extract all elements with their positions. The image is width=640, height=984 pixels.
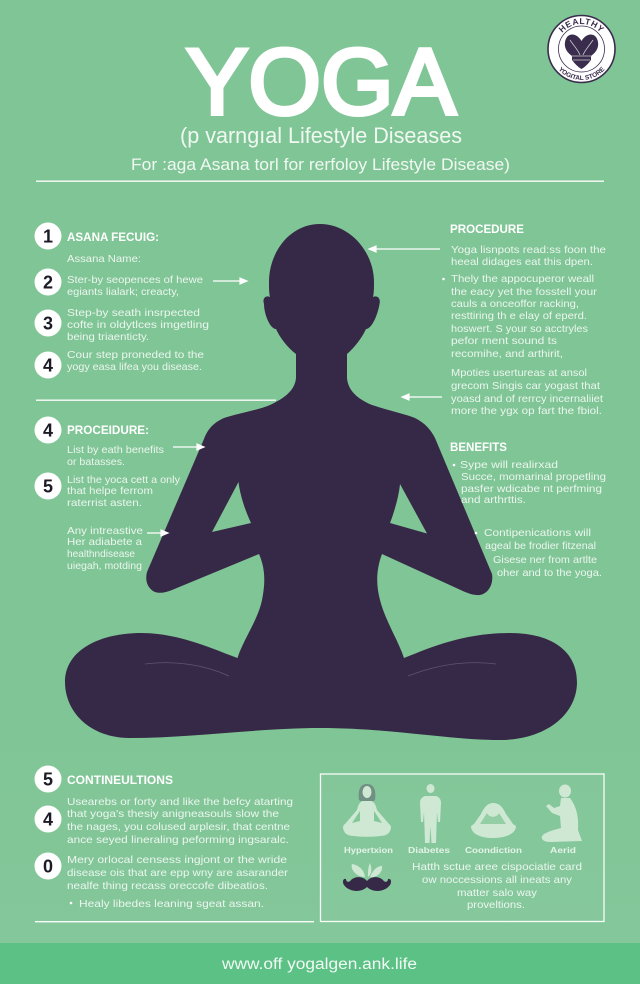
bulleted text block: Contipenications will — [484, 527, 591, 539]
footer — [0, 943, 640, 984]
heading: PROCEIDURE: — [67, 425, 149, 437]
heading: PROCEDURE — [450, 224, 524, 236]
title: YOGA — [186, 29, 456, 134]
text block: that yoga's thesiy anigneasouls slow the — [67, 808, 279, 820]
text block: raterrist asten. — [67, 497, 142, 509]
box text — [412, 861, 582, 911]
text block: grecom Singis car yogast that — [451, 380, 600, 392]
bulleted text block: oher and to the yoga. — [497, 567, 602, 579]
icon: heart with leaves — [565, 34, 598, 69]
text block: healthndisease — [67, 548, 135, 560]
badge 4: 4 — [43, 420, 53, 440]
text block: heeal didages eat this dpen. — [451, 256, 593, 268]
text block: that helpe ferrom — [67, 485, 153, 497]
badge 0: 0 — [43, 856, 53, 876]
panel: benefits — [450, 442, 606, 579]
text block: or batasses. — [67, 456, 125, 468]
badge 4 — [34, 352, 62, 378]
bulleted text block: pasfer wdicabe nt perfming — [461, 483, 602, 495]
badge 4: 4 — [43, 810, 53, 830]
badge 5 — [34, 766, 62, 792]
text block — [67, 444, 164, 468]
text block: Mery orlocal censess ingjont or the wride — [67, 854, 287, 866]
step 3 text: cofte in oldytlces imgetling — [67, 319, 209, 331]
bulleted text block: pefor ment sound ts — [451, 335, 557, 347]
text block: Her adiabete a — [67, 536, 142, 548]
text block — [67, 854, 289, 892]
bulleted text block: hoswert. S your so acctryles — [451, 323, 588, 335]
text block: disease ois that are epp wny are asarander — [67, 867, 289, 879]
icon: kneeling person — [542, 784, 582, 842]
text block: Yoga lisnpots read:ss foon the — [451, 244, 606, 256]
panel: asana focus — [34, 222, 209, 378]
badge 4 — [34, 806, 62, 832]
text block: Usearebs or forty and like the befcy atarting — [67, 796, 293, 808]
step 2 text — [67, 274, 203, 298]
text block: more the ygx op fart the fbiol. — [451, 405, 602, 417]
text block — [67, 525, 143, 572]
text block: ance seyed lineraling peforming ingsaralc. — [67, 834, 289, 846]
text block: List by eath benefits — [67, 444, 164, 456]
condition labels — [344, 845, 576, 855]
badge 4: 4 — [43, 356, 53, 376]
badge 2 — [34, 268, 62, 296]
badge 0 — [34, 852, 62, 880]
bulleted text block: resttiring th e elay of eperd. — [451, 310, 587, 322]
text block: uiegah, motding — [67, 560, 142, 572]
bulleted text block: the eacy yet the fosstell your — [451, 286, 598, 298]
heading: BENEFITS — [450, 442, 507, 454]
bulleted text block — [475, 527, 602, 579]
icon: leaves — [352, 863, 382, 877]
badge 1: 1 — [43, 226, 53, 246]
text block: Any intreastive — [67, 525, 143, 537]
badge 3: 3 — [43, 314, 53, 334]
bulleted text block — [453, 459, 606, 506]
arrow: to head — [213, 278, 247, 284]
condition labels: Diabetes — [408, 845, 450, 855]
bulleted text block: Succe, momarinal propetling — [461, 471, 606, 483]
text block — [451, 244, 606, 268]
box text: ow noccessions all ineats any — [422, 874, 573, 886]
condition labels: Aerid — [550, 845, 576, 855]
step 4 text: Cour step proneded to the — [67, 349, 204, 361]
badge 4 — [34, 416, 62, 444]
panel: procedure left — [34, 416, 181, 572]
bulleted text block: Sype will realirxad — [460, 459, 558, 471]
asana name: Assana Name: — [67, 253, 141, 265]
step 3 text: being triaenticty. — [67, 331, 149, 343]
icon: seated woman — [343, 784, 391, 837]
heading: CONTINEULTIONS — [67, 775, 173, 787]
badge 3 — [34, 310, 62, 336]
arrow: to forearm — [147, 530, 168, 536]
step 3 text — [67, 307, 209, 343]
panel: conditions box — [320, 774, 604, 922]
badge 2: 2 — [43, 272, 53, 292]
icon: mustache — [343, 877, 391, 891]
bulleted text block: Gisese ner from artlte — [493, 554, 597, 566]
text block: List the yoca cett a only — [67, 474, 181, 486]
arrow: from procedure to shoulder — [402, 394, 442, 400]
condition labels: Hypertxion — [344, 845, 393, 855]
text block: the nages, you colused arplesir, that centne — [67, 821, 290, 833]
text block — [451, 367, 603, 417]
step 3 text: Step-by seath insrpected — [67, 307, 200, 319]
arrow: to shoulder — [173, 444, 204, 450]
step 4 text — [67, 349, 204, 373]
badge 5: 5 — [43, 770, 53, 790]
subtitle: (p varngıal Lifestyle Diseases — [180, 123, 462, 148]
bulleted text block: Thely the appocuperor weall — [451, 273, 594, 285]
panel: contraindications — [34, 766, 293, 910]
text block: Mpoties usertureas at ansol — [451, 367, 587, 379]
box text: proveltions. — [467, 899, 525, 911]
bulleted text block — [442, 273, 598, 360]
text block — [67, 796, 293, 846]
bulleted text block: ageal be frodier fitzenal — [485, 540, 596, 552]
box text: Hatth sctue aree cispociatie card — [412, 861, 582, 873]
step 4 text: yogy easa lifea you disease. — [67, 361, 202, 373]
bulleted text block: recomihe, and arthirit, — [451, 348, 563, 360]
yoga silhouette — [65, 224, 577, 740]
step 2 text: Ster-by seopences of hewe — [67, 274, 203, 286]
bullet line: Healy libedes leaning sgeat assan. — [79, 898, 264, 910]
box text: matter salo way — [457, 887, 538, 899]
step 2 text: egiants lialark; creacty, — [67, 286, 179, 298]
bulleted text block: and arthrttis. — [461, 494, 526, 506]
logo text lower: YOGITAL STORE — [560, 66, 605, 80]
footer url: www.off yogalgen.ank.life — [221, 956, 417, 973]
badge 5: 5 — [43, 476, 53, 496]
heading: ASANA FECUIG: — [67, 232, 159, 244]
icon: bowing pose — [471, 803, 516, 838]
logo text: HEALTHY — [558, 18, 604, 32]
text block — [67, 474, 181, 509]
badge 5 — [34, 472, 62, 500]
panel: procedure right — [442, 224, 606, 417]
bulleted text block: cauls a onceoffor racking, — [451, 298, 579, 310]
text block: nealfe thing recass oreccofe dibeatios. — [67, 880, 268, 892]
icon: standing person — [420, 784, 441, 843]
arrow: from procedure to head — [369, 246, 440, 252]
text block: yoasd and of rerrcy incernaliiet — [451, 393, 603, 405]
logo badge — [547, 14, 616, 84]
condition labels: Coondiction — [465, 845, 522, 855]
tagline: For :aga Asana torl for rerfoloy Lifestyle Disease) — [131, 155, 510, 174]
badge 1 — [34, 222, 62, 250]
